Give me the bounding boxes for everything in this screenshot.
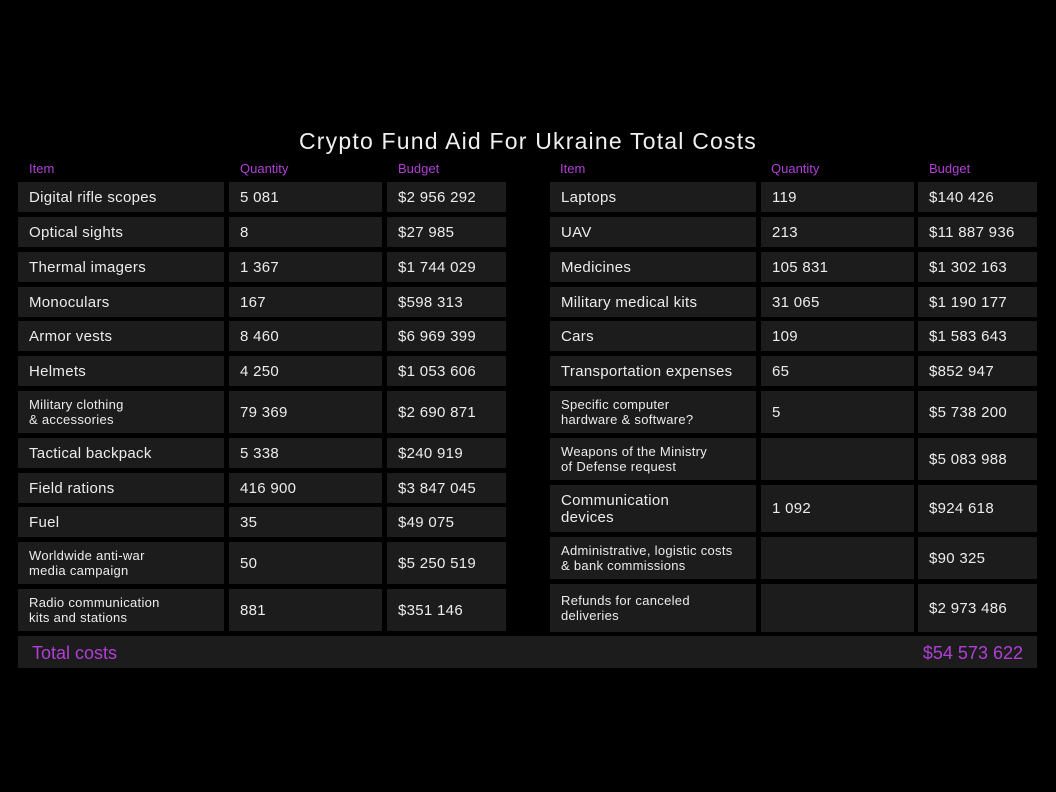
panel: left table: $6 969 399: [398, 328, 476, 344]
panel: left table: 1 367: [240, 258, 279, 276]
panel: left table: Armor vests: [29, 328, 112, 344]
panel: right table: $924 618: [929, 500, 994, 517]
panel: right table: Budget: [929, 161, 970, 176]
row: Armor vests: [18, 321, 506, 351]
panel: right table: $2 973 486: [929, 600, 1007, 616]
panel: right table: & bank commissions: [561, 558, 686, 573]
total label: Total costs: [32, 643, 117, 663]
panel: left table: Quantity: [240, 161, 288, 176]
panel: right table: devices: [561, 508, 614, 526]
panel: left table: 8: [240, 224, 249, 240]
panel: left table: $2 690 871: [398, 404, 476, 420]
row: Communication devices: [550, 485, 1037, 532]
row: Specific hardware: [550, 391, 1037, 433]
panel: right table: UAV: [561, 224, 592, 240]
header: left: [29, 161, 440, 176]
row: Optical sights: [18, 217, 506, 247]
row: Radio communication: [18, 589, 506, 631]
header: right: [560, 161, 970, 176]
panel: left table: Optical sights: [29, 224, 123, 240]
row: Administrative: [550, 537, 1037, 579]
panel: left table: Budget: [398, 161, 439, 176]
panel: left table: [18, 161, 506, 631]
panel: left table: 50: [240, 554, 257, 572]
total row: [18, 636, 1037, 668]
panel: right table: Transportation expenses: [561, 362, 732, 380]
panel: right table: $11 887 936: [929, 224, 1015, 240]
row: Fuel: [18, 507, 506, 537]
row: Cars: [550, 321, 1037, 351]
row: Military clothing: [18, 391, 506, 433]
panel: right table: deliveries: [561, 608, 619, 623]
panel: left table: 167: [240, 294, 266, 310]
panel: left table: media campaign: [29, 563, 129, 578]
row: Military medical kits: [550, 287, 1037, 317]
panel: left table: Field rations: [29, 480, 115, 496]
panel: right table: Cars: [561, 328, 594, 344]
panel: right table: $140 426: [929, 188, 994, 206]
panel: left table: & accessories: [29, 412, 114, 427]
panel: right table: Medicines: [561, 258, 631, 276]
panel: left table: Item: [29, 161, 54, 176]
panel: right table: 31 065: [772, 294, 820, 310]
panel: left table: 5 081: [240, 188, 279, 206]
panel: left table: 5 338: [240, 444, 279, 462]
row: Field rations: [18, 473, 506, 503]
panel: right table: $5 738 200: [929, 404, 1007, 420]
row: Thermal imagers: [18, 252, 506, 282]
panel: left table: $598 313: [398, 294, 463, 310]
panel: left table: 881: [240, 602, 266, 618]
panel: right table: Quantity: [771, 161, 819, 176]
panel: right table: 1 092: [772, 500, 811, 517]
panel: right table: 65: [772, 362, 789, 380]
row: Helmets: [18, 356, 506, 386]
panel: left table: Military clothing: [29, 397, 124, 412]
panel: left table: $1 744 029: [398, 258, 476, 276]
panel: left table: Tactical backpack: [29, 444, 152, 462]
row: Weapons: [550, 438, 1037, 480]
panel: left table: Fuel: [29, 514, 59, 530]
panel: left table: Helmets: [29, 362, 86, 380]
panel: right table: $1 190 177: [929, 294, 1007, 310]
total value: $54 573 622: [923, 643, 1023, 663]
panel: right table: Specific computer: [561, 397, 669, 412]
panel: left table: Worldwide anti-war: [29, 548, 145, 563]
row: Medicines: [550, 252, 1037, 282]
panel: left table: $2 956 292: [398, 188, 476, 206]
panel: left table: 8 460: [240, 328, 279, 344]
panel: left table: Radio communication: [29, 595, 160, 610]
panel: left table: $49 075: [398, 514, 454, 530]
panel: right table: Item: [560, 161, 585, 176]
row: Monoculars: [18, 287, 506, 317]
row: Worldwide campaign: [18, 542, 506, 584]
panel: right table: $90 325: [929, 550, 985, 566]
panel: left table: $1 053 606: [398, 362, 476, 380]
panel: left table: $351 146: [398, 602, 463, 618]
panel: left table: Thermal imagers: [29, 258, 146, 276]
panel: right table: 213: [772, 224, 798, 240]
panel: left table: 35: [240, 514, 257, 530]
panel: right table: $852 947: [929, 362, 994, 380]
panel: left table: $27 985: [398, 224, 454, 240]
panel: right table: Refunds for canceled: [561, 593, 690, 608]
panel: left table: 79 369: [240, 404, 288, 420]
panel: right table: hardware & software?: [561, 412, 693, 427]
row: Refunds: [550, 584, 1037, 632]
panel: right table: 119: [772, 188, 797, 206]
panel: right table: 109: [772, 328, 798, 344]
panel: right table: $1 302 163: [929, 258, 1007, 276]
panel: right table: 5: [772, 404, 781, 420]
row: UAV: [550, 217, 1037, 247]
panel: left table: $5 250 519: [398, 554, 476, 572]
panel: right table: Communication: [561, 492, 669, 508]
title: Crypto Fund Aid For Ukraine Total Costs: [299, 128, 757, 154]
panel: right table: Military medical kits: [561, 294, 697, 310]
panel: left table: $240 919: [398, 444, 463, 462]
panel: right table: $1 583 643: [929, 328, 1007, 344]
panel: left table: kits and stations: [29, 610, 127, 625]
panel: left table: Digital rifle scopes: [29, 188, 157, 206]
panel: right table: Laptops: [561, 188, 616, 206]
panel: right table: Administrative, logistic costs: [561, 543, 733, 558]
panel: right table: [550, 161, 1037, 632]
panel: left table: 4 250: [240, 362, 279, 380]
row: Digital rifle scopes: [18, 182, 506, 212]
panel: right table: of Defense request: [561, 459, 676, 474]
panel: left table: 416 900: [240, 480, 296, 496]
panel: right table: 105 831: [772, 258, 828, 276]
panel: left table: $3 847 045: [398, 480, 476, 496]
panel: right table: Weapons of the Ministry: [561, 444, 707, 459]
panel: left table: Monoculars: [29, 294, 110, 310]
row: Laptops: [550, 182, 1037, 212]
panel: right table: $5 083 988: [929, 450, 1007, 468]
row: Tactical backpack: [18, 438, 506, 468]
row: Transportation: [550, 356, 1037, 386]
